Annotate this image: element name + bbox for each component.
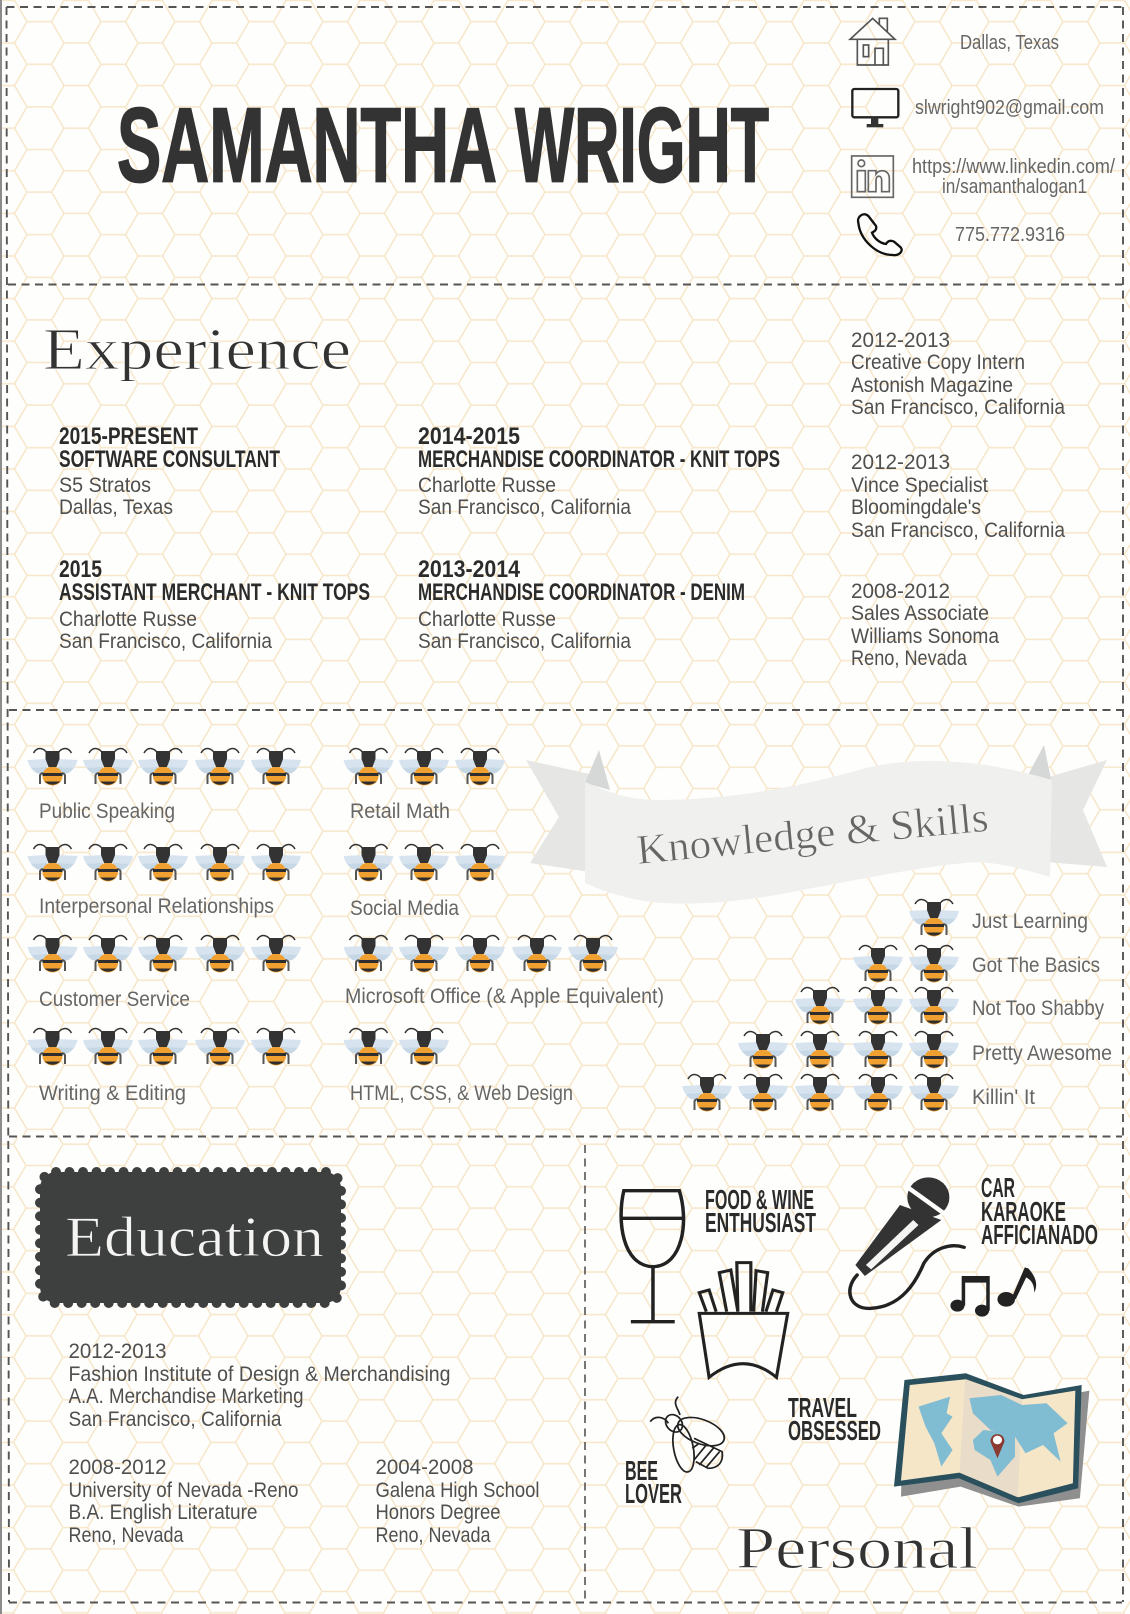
legend: rating scale: Not Too Shabby <box>972 997 1104 1020</box>
job: sales associate: Sales Associate <box>851 602 989 625</box>
school: university of nevada <box>68 1456 298 1547</box>
school: fashion institute <box>68 1340 450 1431</box>
job: assistant merchant: Charlotte Russe <box>59 608 197 631</box>
contact: linkedin: in/samanthalogan1 <box>942 176 1087 198</box>
job: merchandise coordinator knit tops <box>418 423 780 519</box>
label: bee lover <box>625 1455 682 1509</box>
school: galena high school: Galena High School <box>376 1479 540 1502</box>
contact: location: Dallas, Texas <box>960 32 1059 54</box>
job: merchandise coordinator denim: San Francisco, California <box>418 630 631 653</box>
skill rating: public speaking <box>28 749 301 823</box>
job: software consultant: Dallas, Texas <box>59 496 173 519</box>
skill rating: interpersonal relationships <box>28 845 301 918</box>
job: creative copy intern: Creative Copy Intern <box>851 351 1025 374</box>
job: vince specialist: 2012-2013 <box>851 451 950 474</box>
honeycomb background lower <box>0 1137 1130 1614</box>
skill rating: microsoft office: Microsoft Office (& Apple Equivalent) <box>345 985 664 1008</box>
title: SAMANTHA <box>117 86 497 204</box>
job: software consultant: SOFTWARE CONSULTANT <box>59 446 280 473</box>
label: travel obsessed: TRAVEL <box>788 1392 857 1423</box>
job: merchandise coordinator knit tops: 2014-2015 <box>418 423 520 450</box>
icon: phone <box>858 214 902 255</box>
icon: fries <box>699 1263 788 1377</box>
icon: house <box>850 18 895 65</box>
label: food and wine <box>705 1184 816 1238</box>
skill rating: microsoft office <box>344 936 664 1008</box>
job: software consultant <box>59 423 280 519</box>
honeycomb background upper <box>0 0 1130 1137</box>
label: bee lover: BEE <box>625 1455 658 1486</box>
job: merchandise coordinator denim: Charlotte Russe <box>418 608 556 631</box>
icon: linkedin <box>852 156 893 197</box>
skill rating: social media: Social Media <box>350 897 459 920</box>
job: vince specialist: Vince Specialist <box>851 474 988 497</box>
school: university of nevada: University of Nevada -Reno <box>68 1479 298 1502</box>
school: university of nevada: B.A. English Literature <box>68 1501 258 1524</box>
label: car karaoke: CAR <box>981 1172 1015 1203</box>
heading badge: education <box>40 1172 341 1303</box>
job: software consultant: S5 Stratos <box>59 474 151 497</box>
job: sales associate: Reno, Nevada <box>851 647 967 670</box>
label: bee lover: LOVER <box>625 1478 682 1509</box>
job: vince specialist: Bloomingdale's <box>851 496 981 519</box>
legend: rating scale: Killin' It <box>972 1086 1035 1109</box>
icon: monitor <box>852 89 898 127</box>
job: merchandise coordinator denim: MERCHANDISE COORDINATOR - DENIM <box>418 579 745 606</box>
panel: education <box>40 1172 540 1547</box>
skill rating: writing and editing: Writing & Editing <box>39 1082 186 1105</box>
job: software consultant: 2015-PRESENT <box>59 423 198 450</box>
legend: rating scale: Just Learning <box>972 910 1088 933</box>
skill rating: html css web design <box>344 1029 573 1105</box>
panel: experience <box>43 316 1065 670</box>
school: fashion institute: A.A. Merchandise Marketing <box>68 1385 304 1408</box>
school: university of nevada: Reno, Nevada <box>68 1524 184 1547</box>
job: assistant merchant: 2015 <box>59 556 102 583</box>
icon: microphone <box>850 1177 964 1308</box>
contact: linkedin <box>912 156 1115 198</box>
label: travel obsessed <box>788 1392 881 1446</box>
panel: knowledge and skills <box>28 745 1112 1112</box>
label: food and wine: ENTHUSIAST <box>705 1207 816 1238</box>
panel: contact <box>850 18 1115 255</box>
skill rating: writing and editing <box>28 1029 301 1105</box>
legend: rating scale <box>682 900 1112 1112</box>
job: assistant merchant <box>59 556 370 653</box>
heading badge: education: Education <box>65 1206 324 1269</box>
job: vince specialist <box>851 451 1065 542</box>
job: merchandise coordinator knit tops: MERCHANDISE COORDINATOR - KNIT TOPS <box>418 446 780 473</box>
job: creative copy intern: 2012-2013 <box>851 329 950 352</box>
job: assistant merchant: ASSISTANT MERCHANT - KNIT TOPS <box>59 579 370 606</box>
label: food and wine: FOOD & WINE <box>705 1184 814 1215</box>
left page edge <box>0 0 2 1614</box>
skill rating: interpersonal relationships: Interpersonal Relationships <box>39 895 274 918</box>
job: creative copy intern <box>851 329 1065 419</box>
skill rating: customer service <box>28 936 301 1011</box>
contact: phone: 775.772.9316 <box>955 224 1065 246</box>
icon: wine glass <box>620 1191 684 1322</box>
skill rating: html css web design: HTML, CSS, & Web Design <box>350 1082 573 1105</box>
icon: bee outline <box>650 1397 729 1474</box>
school: galena high school: Reno, Nevada <box>376 1524 491 1547</box>
job: merchandise coordinator denim <box>418 556 745 653</box>
legend: rating scale: Got The Basics <box>972 954 1100 977</box>
icon: music notes <box>950 1267 1036 1317</box>
school: fashion institute: San Francisco, California <box>68 1408 282 1431</box>
label: car karaoke <box>981 1172 1098 1250</box>
job: sales associate: 2008-2012 <box>851 580 950 603</box>
skill rating: retail math: Retail Math <box>350 800 450 823</box>
contact: email: slwright902@gmail.com <box>915 97 1104 119</box>
heading: experience: Experience <box>43 316 351 382</box>
job: sales associate <box>851 580 999 670</box>
skill rating: customer service: Customer Service <box>39 988 190 1011</box>
job: merchandise coordinator knit tops: San Francisco, California <box>418 496 631 519</box>
job: vince specialist: San Francisco, California <box>851 519 1065 542</box>
title: WRIGHT <box>515 86 769 204</box>
job: creative copy intern: San Francisco, California <box>851 396 1065 419</box>
school: university of nevada: 2008-2012 <box>68 1456 166 1479</box>
school: fashion institute: Fashion Institute of Design & Merchandising <box>68 1363 450 1386</box>
skill rating: retail math <box>344 749 505 823</box>
ribbon banner: Knowledge & Skills <box>635 795 990 874</box>
skill rating: public speaking: Public Speaking <box>39 800 175 823</box>
school: fashion institute: 2012-2013 <box>68 1340 166 1363</box>
heading: personal: Personal <box>736 1515 978 1581</box>
label: travel obsessed: OBSESSED <box>788 1415 881 1446</box>
label: car karaoke: KARAOKE <box>981 1196 1066 1227</box>
contact: linkedin: https://www.linkedin.com/ <box>912 156 1115 178</box>
school: galena high school: Honors Degree <box>376 1501 500 1524</box>
job: merchandise coordinator knit tops: Charlotte Russe <box>418 474 556 497</box>
school: galena high school <box>376 1456 540 1547</box>
panel: personal <box>620 1172 1098 1581</box>
school: galena high school: 2004-2008 <box>376 1456 474 1479</box>
job: assistant merchant: San Francisco, California <box>59 630 272 653</box>
job: creative copy intern: Astonish Magazine <box>851 374 1013 397</box>
job: merchandise coordinator denim: 2013-2014 <box>418 556 521 583</box>
legend: rating scale: Pretty Awesome <box>972 1042 1112 1065</box>
icon: map <box>894 1373 1089 1507</box>
skill rating: social media <box>344 845 505 920</box>
ribbon banner <box>526 745 1107 904</box>
job: sales associate: Williams Sonoma <box>851 625 999 648</box>
